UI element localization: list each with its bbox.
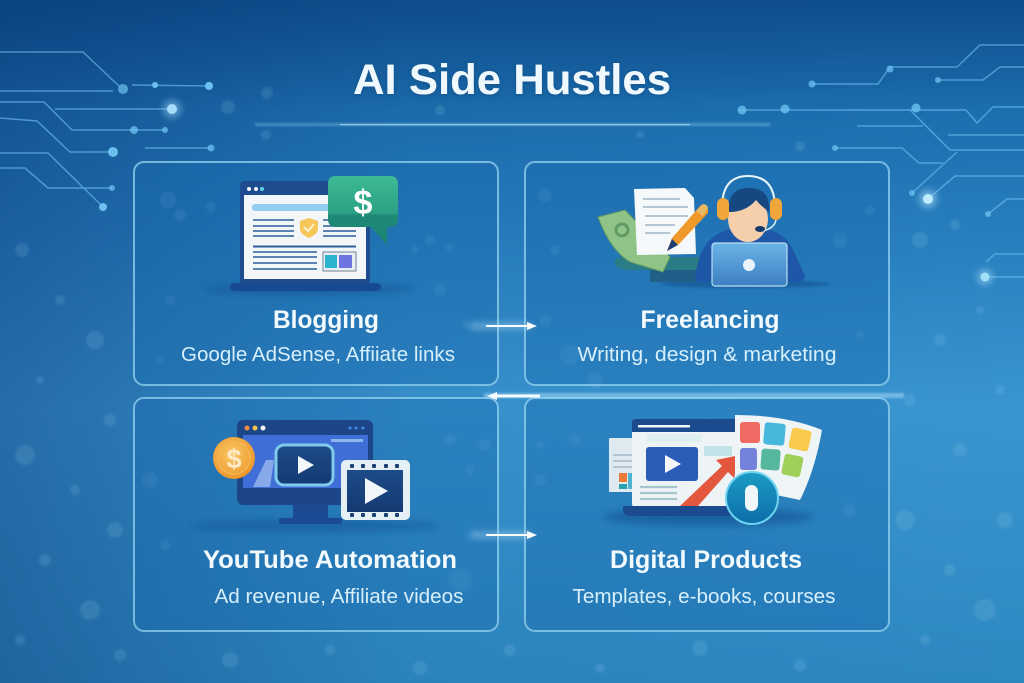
heading: youtube automation: YouTube Automation [203, 546, 457, 574]
circuit lines left [0, 52, 214, 211]
icon: laptop with blog page and dollar bubble [205, 176, 415, 295]
heading: freelancing: Freelancing [640, 306, 780, 334]
title: AI Side Hustles [353, 56, 671, 104]
panel: freelancing [525, 162, 889, 385]
arrow: freelancing to youtube automation [484, 392, 904, 400]
heading: digital products: Digital Products [610, 546, 802, 574]
icon: monitor with video and coin [190, 420, 440, 532]
description: freelancing: Writing, design & marketing [578, 344, 836, 366]
icon: monitor with video and coin: $ [226, 444, 242, 474]
icon: laptop with blog page and dollar bubble: $ [354, 184, 373, 222]
description: digital products: Templates, e-books, courses [572, 586, 836, 608]
circuit lines right [738, 45, 1024, 285]
panel: digital products [525, 398, 889, 631]
description: blogging: Google AdSense, Affiiate links [181, 344, 455, 366]
arrow: blogging to freelancing [470, 322, 537, 330]
title divider glow [255, 123, 770, 126]
description: youtube automation: Ad revenue, Affiliate videos [214, 586, 464, 608]
heading: blogging: Blogging [273, 306, 379, 334]
panel: youtube automation [134, 398, 498, 631]
icon: digital product window with palette [603, 415, 822, 526]
panel: blogging [134, 162, 498, 385]
arrow: youtube automation to digital products [470, 531, 537, 539]
icon: freelancer with headset and laptop [598, 176, 830, 288]
